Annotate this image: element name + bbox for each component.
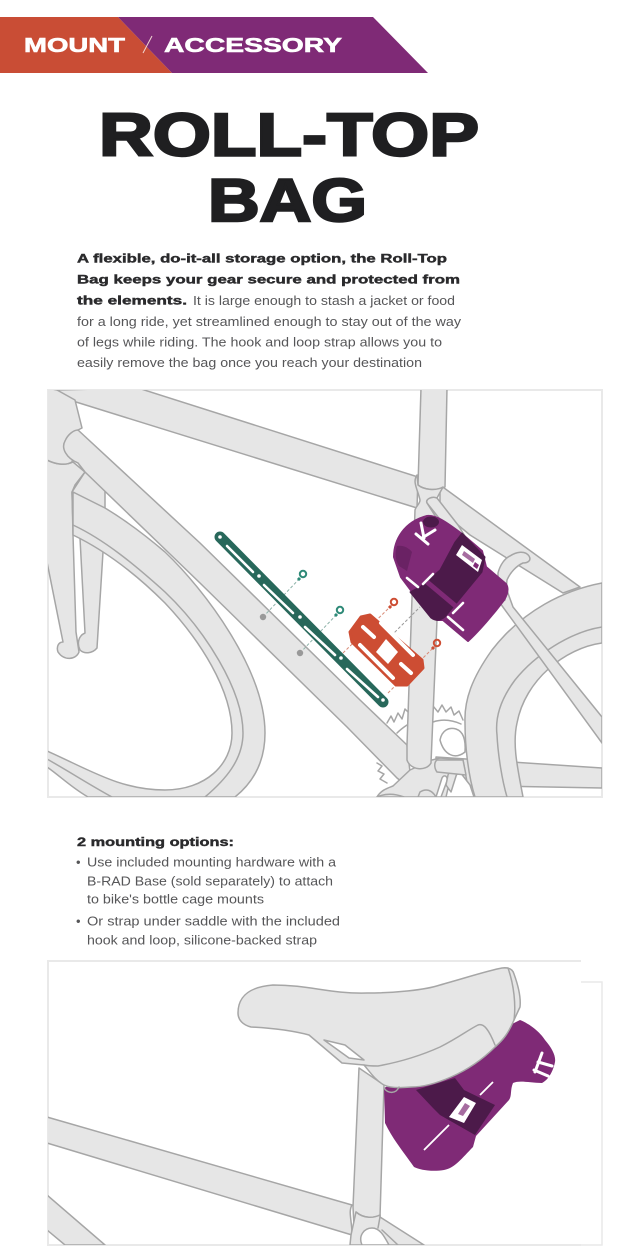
- green screws: [298, 571, 343, 616]
- head tube and top tube: [57, 388, 418, 508]
- down tube: [64, 430, 412, 790]
- seat stay lines: [47, 1195, 105, 1245]
- title: BAG: [208, 167, 367, 234]
- fork right leg: [72, 472, 105, 653]
- saddle: [238, 968, 520, 1092]
- intro text block: A flexible, do-it-all storage option, the Roll-Top: [77, 254, 447, 266]
- fork left leg and crown: [47, 460, 85, 658]
- panel: bottle cage mounting diagram: [47, 388, 602, 797]
- seat tube and post: [353, 1068, 384, 1245]
- bike frame and saddle: [47, 1068, 424, 1245]
- rear wheel: [465, 583, 602, 797]
- mounting options text block: Or strap under saddle with the included: [87, 914, 340, 928]
- top tube: [47, 1117, 352, 1235]
- chain stay: [436, 757, 602, 788]
- B-RAD rail: [218, 535, 385, 702]
- crank and pedal: [440, 728, 465, 756]
- mounting options text block: [76, 837, 340, 948]
- intro text block: of legs while riding. The hook and loop strap allows you to: [77, 334, 442, 350]
- intro text block: easily remove the bag once you reach your destination: [77, 355, 422, 370]
- bike frame line drawing: [47, 388, 602, 797]
- seat stay: [440, 485, 580, 593]
- mounting options text block: B-RAD Base (sold separately) to attach: [87, 874, 333, 888]
- mounting holes on frame: [260, 614, 303, 656]
- roll-top bag: [394, 516, 507, 641]
- mounting options text block: to bike's bottle cage mounts: [87, 892, 265, 906]
- title: [99, 102, 479, 234]
- title: ROLL-TOP: [99, 102, 479, 168]
- intro text block: Bag keeps your gear secure and protected from: [77, 274, 460, 286]
- roll-top bag under saddle: [384, 1020, 555, 1171]
- mounting options text block: hook and loop, silicone-backed strap: [87, 932, 317, 948]
- header banner: mount / accessory: ACCESSORY: [164, 35, 343, 57]
- mounting options text block: 2 mounting options:: [77, 837, 234, 849]
- lower stay: [495, 585, 602, 743]
- mounting options text block: Use included mounting hardware with a: [87, 854, 337, 870]
- chainring: [387, 705, 463, 723]
- lower frame junction: [350, 1212, 424, 1245]
- orange screws: [389, 599, 440, 649]
- mounting dashed guide lines: [263, 576, 436, 693]
- intro text block: the elements.: [77, 296, 187, 308]
- intro text block: It is large enough to stash a jacket or food: [193, 293, 455, 308]
- intro text block: [77, 254, 462, 370]
- mounting options text block: •: [76, 854, 81, 870]
- brake bridge: [498, 552, 530, 600]
- front wheel: [47, 492, 265, 797]
- intro text block: for a long ride, yet streamlined enough to stay out of the way: [77, 314, 462, 329]
- orange adapter plate: [350, 615, 423, 685]
- seat tube: [418, 388, 447, 489]
- header banner: mount / accessory: [0, 17, 428, 73]
- panel: under-saddle mounting diagram: [47, 961, 602, 1245]
- header banner: mount / accessory: MOUNT: [24, 35, 125, 57]
- mounting options text block: •: [76, 914, 81, 928]
